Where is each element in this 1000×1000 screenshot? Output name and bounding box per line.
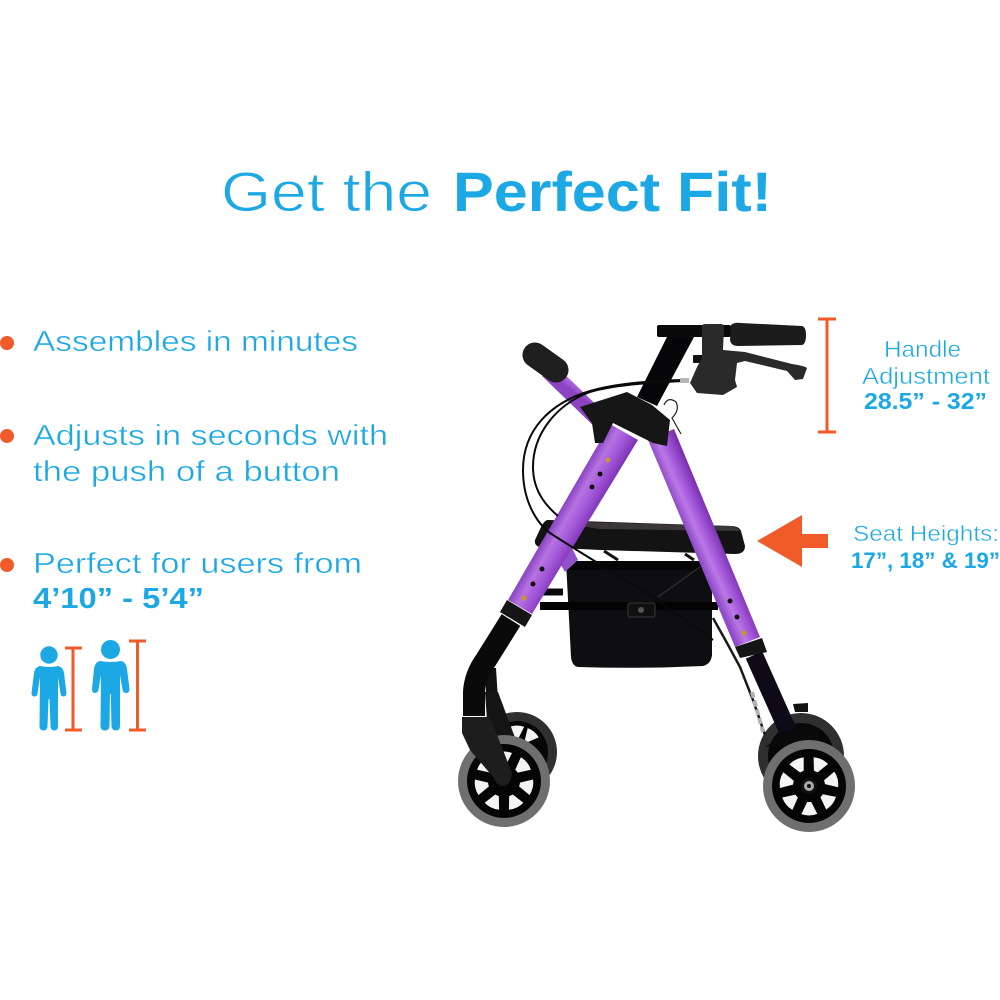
height bracket: shorter bbox=[65, 648, 82, 730]
rear wheel back-left bbox=[477, 712, 557, 792]
feature list bbox=[0, 326, 388, 615]
rear handle tube bbox=[548, 370, 605, 425]
folding bracket bbox=[580, 392, 670, 446]
title: Get the bbox=[221, 160, 432, 223]
bullet: perfect for users bbox=[0, 548, 362, 615]
right lower leg bbox=[713, 618, 822, 747]
icon: two people with height brackets bbox=[32, 640, 146, 730]
bullet: adjusts bbox=[0, 420, 388, 488]
right purple tube bbox=[648, 429, 760, 647]
tube adjustment holes bbox=[522, 458, 746, 636]
seat heights label: Seat Heights: bbox=[853, 521, 999, 546]
icon: taller person bbox=[92, 640, 130, 730]
rear handle grip bbox=[535, 355, 556, 370]
left purple tube bbox=[508, 424, 638, 614]
bullet: perfect for users: Perfect for users from bbox=[33, 548, 362, 580]
handle adjustment label: Adjustment bbox=[862, 363, 991, 389]
black neck bbox=[637, 337, 694, 406]
bullet: adjusts: the push of a button bbox=[33, 456, 340, 488]
underseat bag bbox=[540, 548, 718, 668]
height bracket: taller bbox=[129, 641, 146, 730]
seat bbox=[535, 520, 745, 560]
title: Perfect Fit! bbox=[453, 160, 772, 223]
title bbox=[221, 160, 772, 223]
icon: shorter person bbox=[32, 646, 66, 730]
cable ferrule bbox=[680, 378, 689, 383]
caster fork bbox=[462, 717, 512, 786]
front wheel left bbox=[458, 735, 550, 827]
seat height arrow bbox=[757, 515, 828, 567]
handlebar bbox=[657, 323, 807, 395]
handle adjustment bracket bbox=[818, 319, 836, 432]
handle adjustment label: Handle bbox=[884, 336, 961, 362]
seat heights label bbox=[851, 521, 1000, 573]
bullet: assembles: Assembles in minutes bbox=[33, 326, 358, 358]
dangling wire bbox=[664, 400, 681, 434]
handle adjustment label: 28.5” - 32” bbox=[864, 388, 987, 414]
bullet: adjusts: Adjusts in seconds with bbox=[33, 420, 388, 452]
left lower leg bbox=[474, 600, 532, 735]
rear wheel back-right bbox=[758, 713, 844, 799]
handle adjustment label bbox=[862, 336, 991, 414]
seat heights label: 17”, 18” & 19” bbox=[851, 548, 1000, 573]
rollator walker bbox=[458, 323, 855, 832]
bullet: perfect for users: 4’10” - 5’4” bbox=[33, 583, 204, 615]
front wheel right bbox=[763, 740, 855, 832]
brake cables bbox=[523, 380, 713, 640]
